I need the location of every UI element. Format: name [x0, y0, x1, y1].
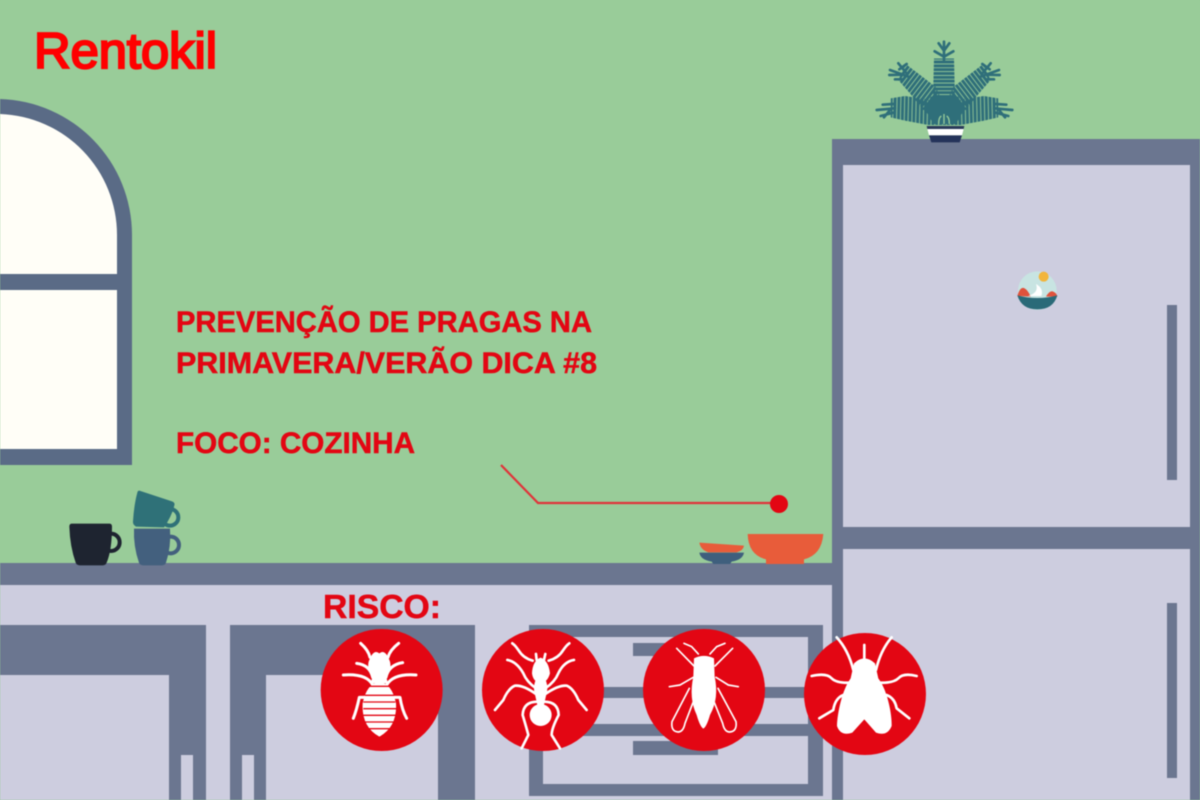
- icon: winged insect: [643, 629, 765, 751]
- logo: Rentokil: Rentokil: [34, 23, 217, 79]
- icon: ant: [482, 629, 604, 751]
- fridge magnet: [1017, 271, 1057, 310]
- cup: teal: [133, 491, 178, 527]
- heading: campaign title: FOCO: COZINHA: [176, 427, 415, 460]
- bowls: [699, 534, 823, 564]
- cabinets base: [0, 585, 832, 800]
- bowl: large orange: [748, 534, 823, 564]
- icon: fly: [804, 633, 926, 755]
- bowl: small orange: [699, 543, 744, 552]
- cup: blue: [134, 529, 179, 565]
- bowl: small blue: [699, 553, 744, 564]
- heading: campaign title: [176, 305, 597, 460]
- drawers: [529, 625, 823, 796]
- cabinet door left: [0, 625, 206, 800]
- cup: dark: [69, 524, 120, 565]
- counter top: [0, 563, 832, 585]
- cups: [69, 491, 179, 565]
- window: [0, 99, 132, 465]
- heading: campaign title: PREVENÇÃO DE PRAGAS NA: [176, 305, 592, 339]
- fridge: [832, 139, 1200, 800]
- callout line with dot: [501, 465, 788, 513]
- label: RISCO: RISCO:: [323, 588, 441, 625]
- cabinet door right: [230, 625, 475, 800]
- icon: termite: [321, 629, 443, 751]
- plant: [877, 42, 1012, 142]
- heading: campaign title: PRIMAVERA/VERÃO DICA #8: [176, 346, 597, 380]
